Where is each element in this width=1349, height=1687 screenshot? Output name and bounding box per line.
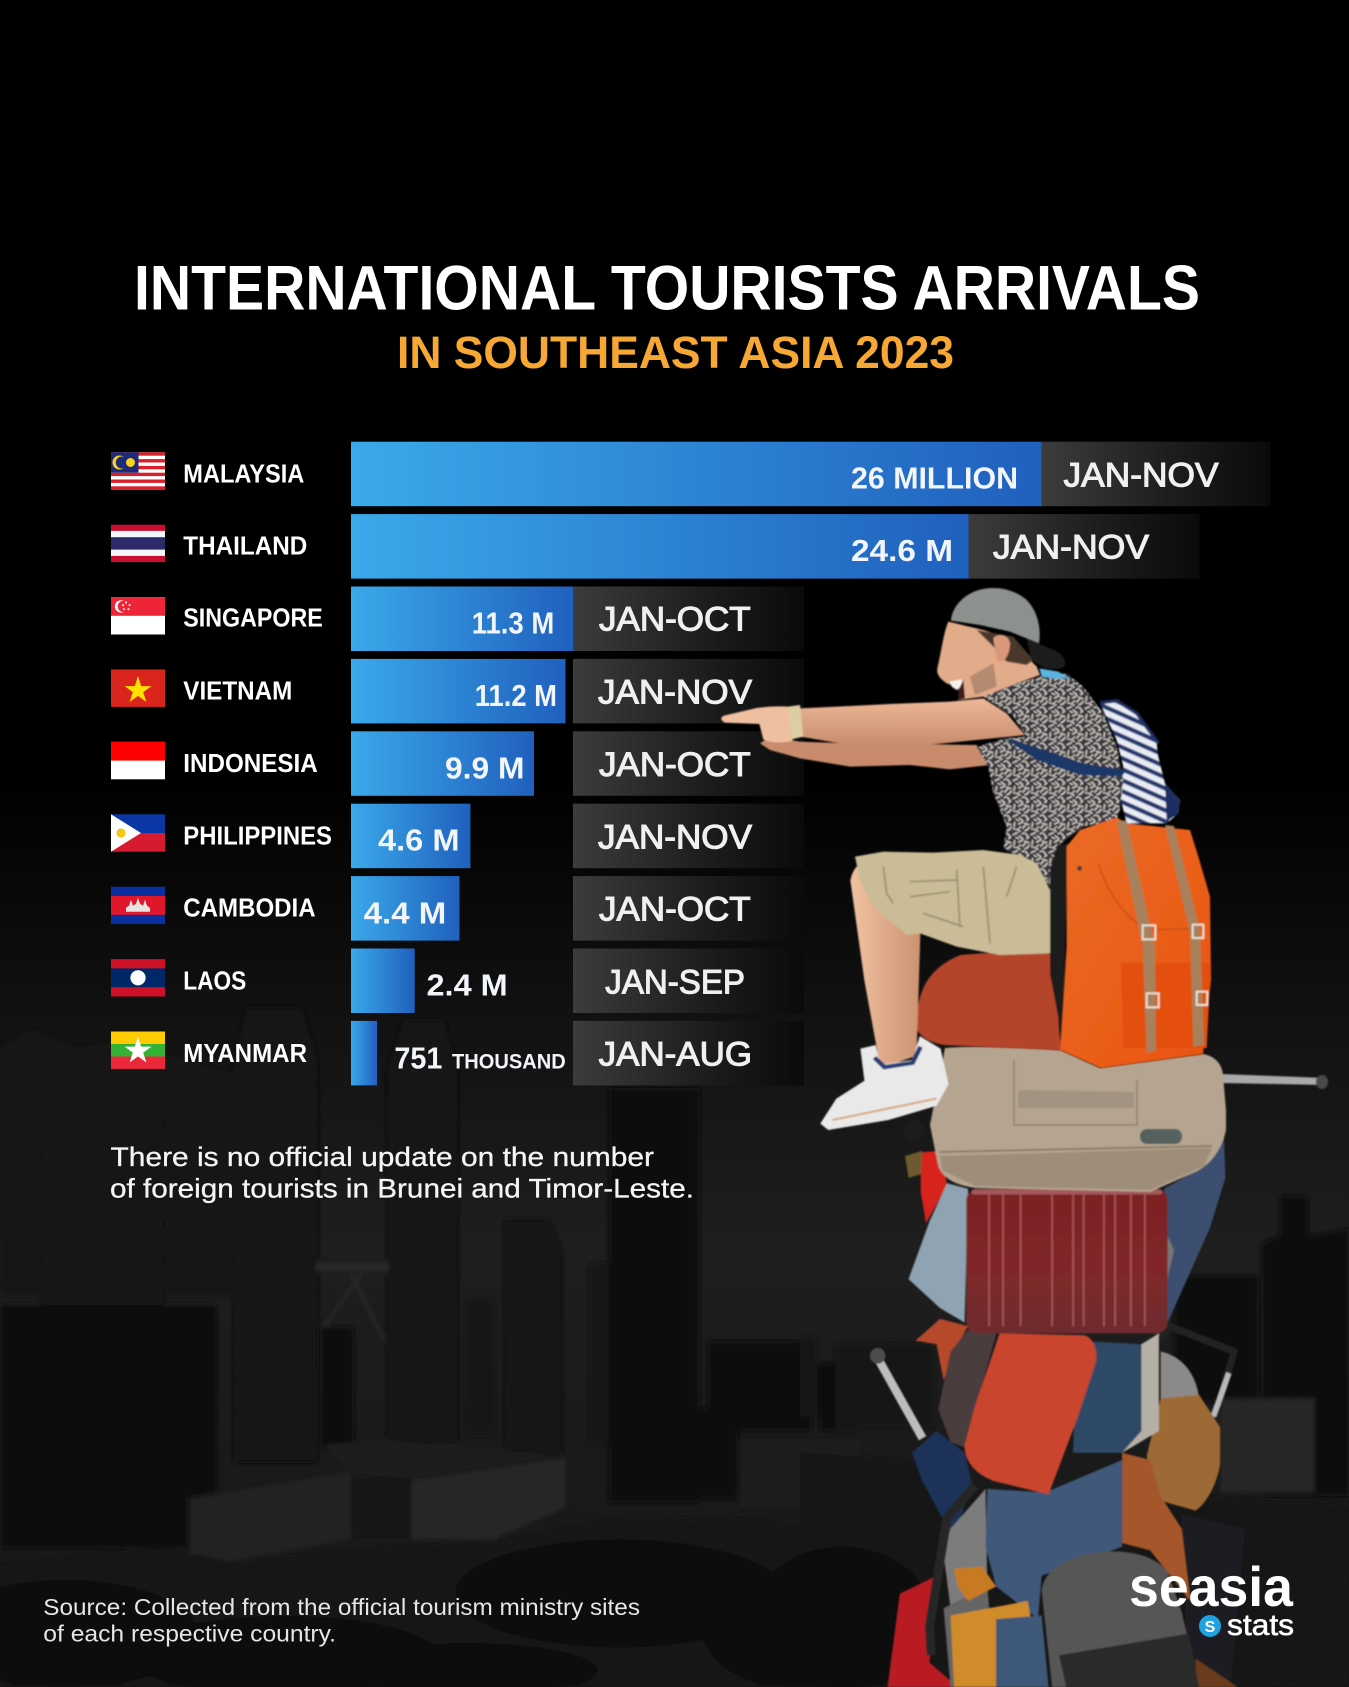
row: Malaysia: JAN-NOV (1064, 457, 1219, 495)
source text: of each respective country. (43, 1620, 336, 1646)
row: Indonesia (111, 731, 804, 796)
row: Vietnam: VIETNAM (183, 675, 292, 705)
row: Thailand: THAILAND (183, 530, 307, 560)
row: Singapore (111, 586, 804, 651)
row: Indonesia: 9.9 M (445, 750, 524, 785)
logo: seasia stats: stats (1227, 1609, 1294, 1642)
row: Thailand: JAN-NOV (993, 529, 1149, 567)
row: Philippines (111, 804, 804, 868)
row: Philippines: 4.6 M (378, 823, 460, 858)
note text (110, 1142, 694, 1203)
row: Cambodia: CAMBODIA (183, 893, 316, 923)
row: Malaysia: MALAYSIA (183, 458, 305, 488)
row: Malaysia (111, 442, 1270, 506)
row: Thailand: 24.6 M (851, 533, 953, 568)
row: Laos: 2.4 M (426, 968, 508, 1003)
row: Myanmar: 751 (394, 1040, 442, 1075)
row: Cambodia: 4.4 M (364, 895, 446, 930)
row: Myanmar: MYANMAR (183, 1038, 307, 1068)
note text: There is no official update on the number (110, 1142, 654, 1172)
row: Singapore: JAN-OCT (599, 601, 751, 639)
row: Vietnam: 11.2 M (475, 678, 557, 713)
subtitle: IN SOUTHEAST ASIA 2023 (397, 327, 954, 378)
row: Singapore: SINGAPORE (183, 603, 323, 633)
row: Cambodia (111, 876, 804, 941)
row: Philippines: PHILIPPINES (183, 821, 332, 851)
illustration: excited man pointing at the chart (721, 588, 1211, 1130)
row: Indonesia: JAN-OCT (599, 746, 751, 784)
logo: seasia stats: seasia (1129, 1555, 1294, 1618)
row: Thailand (111, 514, 1200, 579)
row: Vietnam (111, 659, 804, 723)
row: Cambodia: JAN-OCT (599, 891, 751, 929)
row: Laos: JAN-SEP (605, 963, 745, 1001)
row: Laos (111, 948, 804, 1013)
row: Laos: LAOS (183, 965, 246, 995)
icon: stats badge (1199, 1615, 1221, 1637)
icon: stats badge: S (1205, 1619, 1216, 1636)
note text: of foreign tourists in Brunei and Timor-Leste. (110, 1173, 694, 1203)
source text: Source: Collected from the official tourism ministry sites (43, 1594, 640, 1620)
illustration: stacked luggage pile (870, 1047, 1328, 1687)
bar chart: tourist arrivals by country (111, 442, 1270, 1085)
row: Myanmar (111, 1021, 804, 1085)
title: INTERNATIONAL TOURISTS ARRIVALS (134, 254, 1200, 324)
row: Philippines: JAN-NOV (598, 819, 752, 857)
row: Myanmar: THOUSAND (452, 1050, 566, 1073)
source text (43, 1594, 640, 1646)
row: Vietnam: JAN-NOV (598, 673, 752, 711)
row: Singapore: 11.3 M (472, 605, 554, 640)
row: Malaysia: 26 MILLION (851, 461, 1018, 496)
row: Myanmar: JAN-AUG (599, 1036, 752, 1074)
row: Indonesia: INDONESIA (183, 748, 318, 778)
